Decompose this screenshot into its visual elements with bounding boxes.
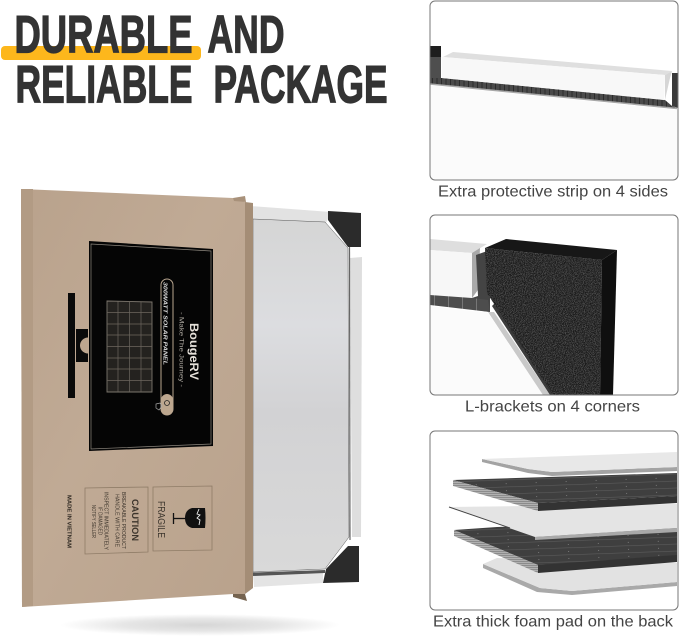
panel: L-brackets bbox=[430, 215, 678, 395]
panel: foam pad layers bbox=[430, 431, 678, 610]
caution box: IF DAMAGED bbox=[96, 507, 102, 535]
panel surface bbox=[430, 85, 678, 180]
strip front face bbox=[430, 250, 472, 298]
white background bbox=[430, 431, 678, 610]
bracket foam front bbox=[485, 248, 602, 395]
bottom protective strip bbox=[253, 573, 323, 587]
white background bbox=[430, 215, 678, 395]
strip front face bbox=[442, 57, 665, 100]
title line 1: RELIABLE bbox=[16, 56, 192, 114]
panel face bbox=[253, 219, 349, 572]
corrugated band bbox=[430, 295, 490, 312]
strip end bbox=[665, 71, 672, 100]
frame bbox=[430, 215, 678, 395]
frame bbox=[430, 431, 678, 610]
title bbox=[1, 6, 388, 114]
right bracket bbox=[672, 73, 678, 108]
panel layer 4 bbox=[454, 522, 677, 573]
solar panel illustration bbox=[107, 301, 152, 392]
panel layer 2 bbox=[453, 473, 677, 511]
box side bbox=[245, 202, 253, 594]
left bracket bbox=[430, 46, 441, 57]
bottom corner bracket bbox=[323, 546, 359, 583]
foam layer 1 bbox=[482, 452, 677, 476]
bracket foam side bbox=[600, 250, 617, 395]
title line 1: AND bbox=[208, 6, 284, 64]
caution box: HANDLE WITH CARE bbox=[114, 494, 120, 548]
solar panel sliding out of box bbox=[250, 206, 362, 587]
bracket foam top bbox=[485, 239, 617, 260]
ground shadow bbox=[60, 614, 340, 636]
caution box: CAUTION bbox=[130, 499, 140, 541]
strip top face bbox=[443, 52, 672, 75]
box front bbox=[21, 189, 245, 607]
title line 1: PACKAGE bbox=[214, 56, 388, 114]
fragile box bbox=[153, 486, 212, 551]
bottom flap bbox=[233, 594, 247, 601]
panel white face bbox=[430, 306, 543, 395]
white background bbox=[430, 1, 678, 180]
corrugated band bbox=[430, 78, 677, 109]
fragile box: FRAGILE bbox=[155, 501, 167, 538]
cardboard box bbox=[21, 189, 253, 607]
icon: broken glass bbox=[173, 508, 206, 528]
title line 1: DURABLE bbox=[14, 6, 192, 64]
caution box: NOTIFY SELLER bbox=[90, 505, 96, 538]
panel grey bevel bbox=[488, 312, 550, 395]
caution box: INSPECT IMMEDIATELY bbox=[102, 492, 108, 551]
foam layer 5 bbox=[483, 558, 677, 595]
brand name: BougeRV bbox=[187, 323, 201, 380]
caption: L-brackets: L-brackets on 4 corners bbox=[465, 398, 640, 416]
caution box: BREAKABLE PRODUCT bbox=[120, 492, 126, 549]
panel: protective strip bbox=[430, 1, 678, 180]
caution box bbox=[85, 487, 148, 554]
top protective strip bbox=[250, 206, 331, 223]
caption: protective strip: Extra protective strip on 4 sides bbox=[438, 184, 668, 200]
dark frame behind bracket bbox=[472, 250, 490, 312]
box left edge bbox=[21, 189, 33, 607]
title line 1 bbox=[14, 6, 388, 114]
frame bbox=[430, 1, 678, 180]
right protective strip bbox=[350, 257, 362, 537]
black label bbox=[89, 241, 213, 451]
top corner bracket bbox=[328, 211, 361, 247]
tagline: - Make The Journey - bbox=[178, 312, 184, 387]
made in vietnam text: MADE IN VIETNAM bbox=[66, 495, 72, 548]
handle cutout marks bbox=[68, 293, 88, 398]
strip end bbox=[472, 248, 480, 298]
top flap bbox=[233, 196, 246, 202]
left frame end bbox=[430, 57, 441, 84]
caption: foam pad: Extra thick foam pad on the back bbox=[433, 614, 674, 630]
product name pill: 300WATT SOLAR PANEL bbox=[162, 282, 168, 366]
title highlight bar bbox=[1, 46, 201, 60]
product name pill bbox=[156, 279, 173, 415]
foam layer 3 bbox=[449, 504, 677, 540]
strip top face bbox=[430, 239, 487, 253]
